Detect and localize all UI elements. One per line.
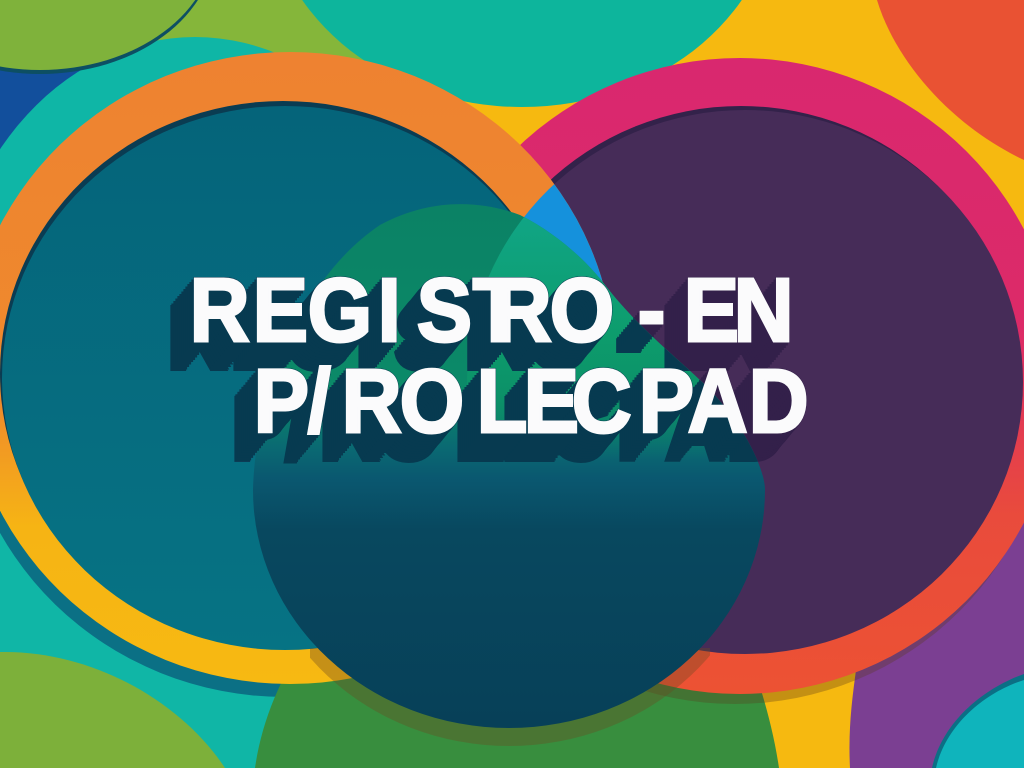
title shadow on teal: REGISTRO - EN — [190, 261, 794, 361]
title shadow on teal: P/ROLECPAD — [254, 352, 809, 452]
title shadow on teal — [190, 261, 809, 452]
title: P/ROLECPAD — [254, 352, 809, 452]
title shadow on purple: P/ROLECPAD — [254, 352, 809, 452]
title: REGISTRO - EN — [190, 261, 794, 361]
title shadow on purple: REGISTRO - EN — [190, 261, 794, 361]
left ring: orange to yellow — [0, 52, 603, 684]
centre circle — [253, 204, 765, 728]
title — [190, 261, 809, 452]
title shadow on purple — [190, 261, 809, 452]
right ring: magenta to red — [417, 58, 1024, 704]
centre circle shadow — [310, 648, 710, 746]
